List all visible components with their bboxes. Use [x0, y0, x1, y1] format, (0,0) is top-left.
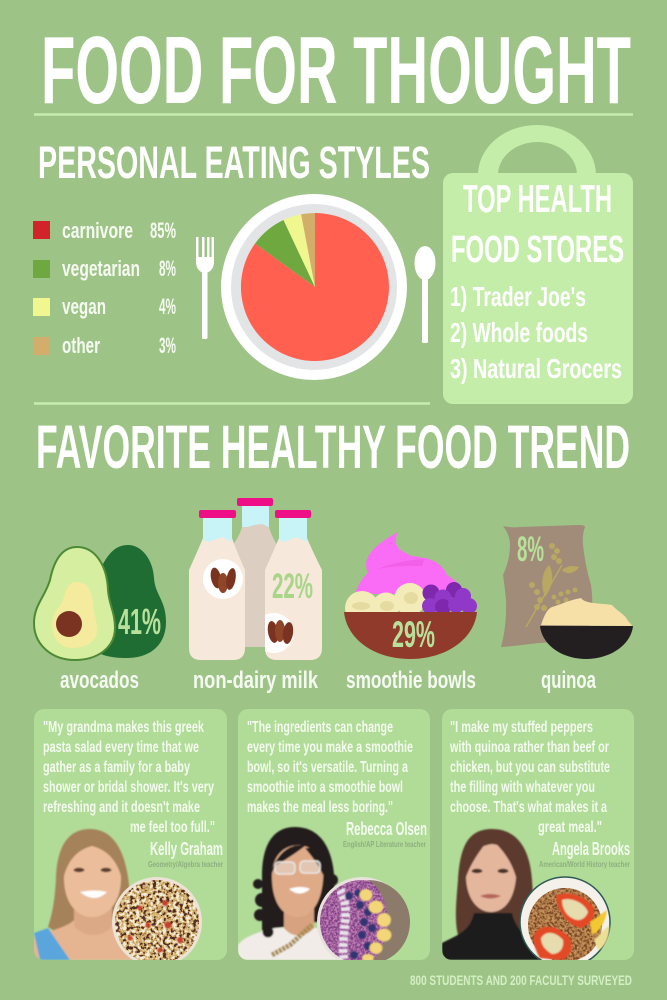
- panel: top health food stores bag: 1) Trader Joe's: [450, 281, 586, 312]
- name: Rebecca Olsen: [346, 819, 427, 839]
- quote text: makes the meal less boring.": [247, 799, 393, 816]
- icon: avocados: [34, 545, 166, 660]
- quote text: refreshing and it doesn't make: [43, 799, 200, 816]
- legend: other: [62, 333, 100, 358]
- panel: top health food stores bag: 2) Whole foods: [450, 317, 588, 348]
- quote text: gather as a family for a baby: [43, 759, 190, 776]
- label: smoothie bowls: smoothie bowls: [346, 667, 476, 694]
- legend: carnivore: [62, 218, 133, 243]
- role: Geometry/Algebra teacher: [148, 859, 223, 869]
- pie chart on plate: [221, 194, 407, 380]
- quote text: me feel too full.": [130, 819, 215, 836]
- quote text: great meal.": [538, 819, 602, 836]
- panel: Kelly Graham quote: [34, 709, 227, 967]
- icon: fork: [196, 237, 214, 339]
- legend: 85%: [150, 218, 176, 243]
- photo: Kelly Graham with pasta salad: [34, 829, 202, 967]
- quote text: [43, 719, 215, 836]
- panel: Angela Brooks quote: [442, 709, 634, 967]
- stat: 41%: 41%: [118, 601, 161, 642]
- quote text: smoothie into a smoothie bowl: [247, 779, 403, 796]
- legend: 4%: [159, 294, 176, 319]
- label: quinoa: quinoa: [541, 667, 596, 694]
- quote text: pasta salad every time that we: [43, 739, 199, 756]
- quote text: shower or bridal shower. It's very: [43, 779, 214, 796]
- photo: Rebecca Olsen with smoothie bowl: [238, 827, 410, 967]
- name: Kelly Graham: [150, 839, 223, 859]
- quote text: every time you make a smoothie: [247, 739, 413, 756]
- quote text: "The ingredients can change: [247, 719, 393, 736]
- legend: vegetarian: [62, 256, 140, 281]
- quote text: bowl, so it's versatile. Turning a: [247, 759, 408, 776]
- icon: quinoa sack and bowl: [501, 525, 633, 659]
- panel: Rebecca Olsen quote: [238, 709, 430, 967]
- legend: [33, 218, 176, 358]
- stat: 29%: 29%: [392, 614, 435, 655]
- quote text: "My grandma makes this greek: [43, 719, 204, 736]
- photo: Angela Brooks with stuffed peppers: [442, 829, 610, 967]
- label: non-dairy milk: non-dairy milk: [193, 667, 318, 694]
- role: English/AP Literature teacher: [343, 839, 426, 849]
- quote text: [247, 719, 413, 816]
- quote text: "I make my stuffed peppers: [450, 719, 593, 736]
- panel: top health food stores bag: [443, 125, 633, 404]
- icon: milk bottles: [189, 498, 322, 660]
- stat: 22%: 22%: [272, 567, 313, 606]
- legend: 8%: [159, 256, 176, 281]
- icon: spoon: [414, 246, 436, 343]
- heading: personal eating styles: PERSONAL EATING STYLES: [38, 137, 430, 188]
- stat: 8%: 8%: [517, 530, 544, 569]
- quote text: the filling with whatever you: [450, 779, 595, 796]
- quote text: [449, 719, 610, 836]
- label: avocados: avocados: [60, 667, 139, 694]
- legend: vegan: [62, 294, 106, 319]
- role: American/World History teacher: [539, 859, 630, 869]
- legend: 3%: [159, 333, 176, 358]
- icon: smoothie bowl: [344, 532, 477, 659]
